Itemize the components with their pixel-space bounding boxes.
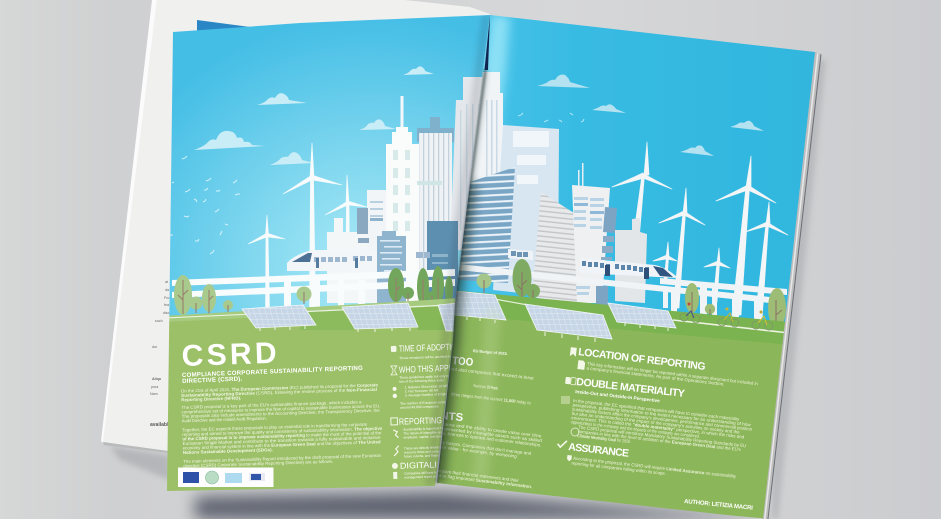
sky glow along spine xyxy=(482,15,516,125)
clouds right page xyxy=(537,75,764,156)
right column: reporting contents: REPORTING CONTENTS xyxy=(399,414,484,427)
location of reporting: LOCATION OF REPORTING xyxy=(578,346,706,373)
intro body text: The CSRD proposal is a key part of the EU's sustainable finance package, which includes a xyxy=(181,399,362,410)
train right page xyxy=(508,249,678,279)
intro body text xyxy=(181,382,384,468)
intro body text: The proposals also include amendments to the Accounting Directive, the Transparency Directive, the xyxy=(182,408,380,419)
double materiality body text: perspective, publishing information to the extent necessary for an understanding of how xyxy=(572,402,752,427)
right column: who this applies: 2. Net Turnover: 40 M€ xyxy=(405,388,439,394)
solar panel 1 xyxy=(242,305,316,328)
solar panel 3 xyxy=(438,303,455,332)
clouds left page xyxy=(194,66,434,165)
double materiality body text: sustainability factors affect the company's development, performance and commercial position xyxy=(572,407,753,432)
intro body text: Sustainability Reporting Directive (CSRD), following the review process of the Non-Financial xyxy=(181,387,377,398)
trees left page xyxy=(174,266,453,316)
double materiality body text: companies in line with the level of ambition of the European Green Deal and the EU's xyxy=(577,429,742,452)
left-column continuation on right page: and to flag important Sustainability Information. xyxy=(434,472,532,489)
intro body text: economy and financial system in line with the European Green Deal and the objectives of The United xyxy=(183,439,381,450)
right column: reporting contents: These are directly linked to climate xyxy=(404,445,453,451)
assurance xyxy=(555,440,739,484)
intro body text: comprehensive set of measures to improve the flow of capital to sustainable businesses across the EU. xyxy=(182,403,381,414)
under page: white sheet with text: da xyxy=(165,288,169,292)
wind turbines left page xyxy=(248,143,367,307)
elevated rails right page xyxy=(458,264,787,322)
under page: white sheet with text: such xyxy=(155,319,163,323)
elevated rails left page xyxy=(172,269,455,308)
location of reporting: This key information will no longer be reported within a separate document but included in xyxy=(587,361,759,386)
under page: white sheet with text: dur xyxy=(152,345,158,349)
left page xyxy=(160,10,500,495)
double materiality body text: Climate Neutrality Goal for 2050. xyxy=(577,433,631,444)
right column: time of adoption: These measures will be ascribed to the xyxy=(399,354,457,360)
under page: white sheet with text: at xyxy=(165,280,168,284)
skyline right page xyxy=(458,72,647,306)
under page: white sheet with text: available xyxy=(150,422,171,428)
intro body text: Reporting Directive (NFRD). xyxy=(181,395,241,402)
ground and solar panels right page xyxy=(425,289,790,519)
intro body text: The main elements on the Sustainability Report introduced by the draft proposal of the new European xyxy=(183,453,382,464)
right column: reporting contents xyxy=(390,417,442,458)
under page: white sheet with text: pora xyxy=(151,385,158,389)
right column: time of adoption: TIME OF ADOPTION xyxy=(399,342,461,354)
right page xyxy=(425,10,830,519)
spine crease line xyxy=(436,15,490,483)
left-column continuation on right page: mance and the ability to create value over time xyxy=(440,421,542,438)
wind turbines right page xyxy=(612,142,788,320)
assurance: reporting for all companies falling within its scope. xyxy=(571,460,666,476)
double materiality body text: opportunities to the company and the impacts of the company are considered. xyxy=(570,419,700,439)
intro body text: European Single Market and contribute to the transition towards a fully sustainable and inclusive xyxy=(183,435,381,446)
double materiality xyxy=(564,375,685,406)
left-column continuation on right page: EU Budget of 2023. xyxy=(473,349,508,356)
right column: who this applies: 3. Average Number of Employees xyxy=(405,392,454,398)
left-column continuation on right page: TOO xyxy=(452,355,474,369)
train left page xyxy=(287,250,430,271)
left page sky xyxy=(169,15,490,316)
left-column continuation on right page: mes but also companies that exceed at least xyxy=(440,365,535,381)
double materiality: DOUBLE MATERIALITY xyxy=(576,376,685,400)
left-column continuation on right page: compare their financial statements and their xyxy=(434,468,520,483)
double materiality body text: but also an understanding of the impact of the company's activities on society and the xyxy=(571,411,741,435)
under page: white sheet with text xyxy=(101,0,490,480)
solar panel 2 xyxy=(342,303,418,329)
location of reporting xyxy=(568,345,760,391)
double materiality body text xyxy=(569,398,754,457)
right column: reporting contents: Sustainability is important for value xyxy=(403,426,453,432)
left-column continuation on right page xyxy=(434,349,543,490)
under page: white sheet with text: Nam xyxy=(150,392,158,396)
under page: white sheet with text: Aliqu xyxy=(152,377,161,381)
cyclist 2 xyxy=(718,308,739,327)
left-column continuation on right page: their value - for example, by worsening xyxy=(437,444,518,459)
birds xyxy=(168,156,240,254)
right column: who this applies: around 49,000 companies. xyxy=(400,404,439,410)
intro body text: Audit Directive and the related Audit Regulation. xyxy=(182,416,267,423)
double materiality body text: environment. This is called the "double materiality" perspective, in which the risks and xyxy=(571,415,745,440)
cyclists xyxy=(680,302,773,330)
subtitle: COMPLIANCE CORPORATE SUSTAINABILITY REPORTING xyxy=(182,365,363,379)
right column: who this applies: These guidelines apply not only to large xyxy=(399,374,458,380)
under page: white sheet with text: Fro xyxy=(164,296,169,300)
cyclist 1 xyxy=(680,302,700,323)
right column: digitalisation: management report and xyxy=(404,474,439,480)
intro body text: On the 21st of April 2021, The European Commission (EC) published its proposal for the Corporate xyxy=(181,382,379,393)
ground and solar panels left page xyxy=(165,298,460,495)
birds right page xyxy=(518,113,584,122)
right column: reporting contents: The nature of intangible assets, xyxy=(403,430,448,436)
logos strip xyxy=(178,468,274,487)
right column: reporting contents: employee, capital, and governance xyxy=(403,434,453,440)
right column: who this applies xyxy=(390,364,450,409)
right column: who this applies: 1. Balance Sheet total: 20 M€ xyxy=(404,384,448,390)
location of reporting: a company's financial statements. As part of the Operations Section. xyxy=(586,366,725,387)
double materiality: Inside-Out and Outside-In Perspective xyxy=(575,389,660,403)
solar panel B xyxy=(525,304,612,339)
assurance: According to the proposal, the CSRD will require Limited Assurance on sustainability xyxy=(573,456,737,479)
right page sky xyxy=(456,15,815,322)
right column: digitalisation xyxy=(392,462,438,479)
double materiality icons xyxy=(561,396,579,436)
assurance: ASSURANCE xyxy=(568,441,630,460)
under page: white sheet with text: disc xyxy=(163,311,170,315)
trees right page xyxy=(476,259,786,322)
right column: reporting contents: resource flows and company-level xyxy=(404,449,453,455)
right column: who this applies: two of the following three tests: xyxy=(399,378,445,384)
left-column continuation on right page: Financial year: 250 People. xyxy=(473,383,498,391)
solar panel A xyxy=(455,291,506,320)
spine shading left page xyxy=(425,15,490,486)
solar panel C xyxy=(608,303,676,328)
under page: white sheet with text: fea xyxy=(164,303,169,307)
right column: time of adoption xyxy=(390,344,452,360)
double materiality body text: The CSRD proposal will introduce Mandatory Sustainability Reporting Standards by EU xyxy=(578,425,746,448)
subtitle: DIRECTIVE (CSRD). xyxy=(182,376,243,385)
intro body text: Together, the EC expects these proposals to play an essential role in transforming the corporate xyxy=(182,422,368,432)
author credit: AUTHOR: LETIZIA MACRI xyxy=(684,499,753,512)
left-column continuation on right page: NTS xyxy=(440,410,464,424)
intro body text: Nations Sustainable Development (SDGs). xyxy=(183,447,273,455)
left-column continuation on right page: ual, licences to operate and customer relationships. xyxy=(439,430,542,448)
right column: who this applies: WHO THIS APPLIES TO xyxy=(399,362,475,375)
intro body text: directive (CSRD) Corporate Sustainability Reporting Directive) are as follows. xyxy=(183,459,333,468)
right column: who this applies: The number of European companies xyxy=(400,400,454,406)
skyline left page xyxy=(327,77,490,303)
left-column continuation on right page: nity factors. Companies that don't manage and xyxy=(438,439,532,456)
CSRD title: CSRD xyxy=(181,337,277,373)
intro body text: reporting and aimed to improve the quality and consistency of sustainability information. The objective xyxy=(182,426,383,437)
right column: digitalisation: Companies will have to digitally xyxy=(404,470,449,476)
right column: reporting contents: future returns, and financial xyxy=(404,453,443,459)
right column: digitalisation: DIGITALISATION xyxy=(400,458,470,471)
double materiality body text: In the proposal, the EC specified that companies will have to consider each materiality xyxy=(573,398,740,422)
right page edge thickness xyxy=(762,52,822,519)
cyclist 3 xyxy=(752,310,773,330)
intro body text: of the CSRD proposal is to improve sustainability reporting to make the most of the potential of the xyxy=(182,430,382,441)
spine shadow and highlight right page xyxy=(437,70,500,483)
left-column continuation on right page: represented by intangible assets such as skilled xyxy=(439,426,543,443)
left-column continuation on right page: three ranges from the current 11,600 today to xyxy=(451,391,532,406)
